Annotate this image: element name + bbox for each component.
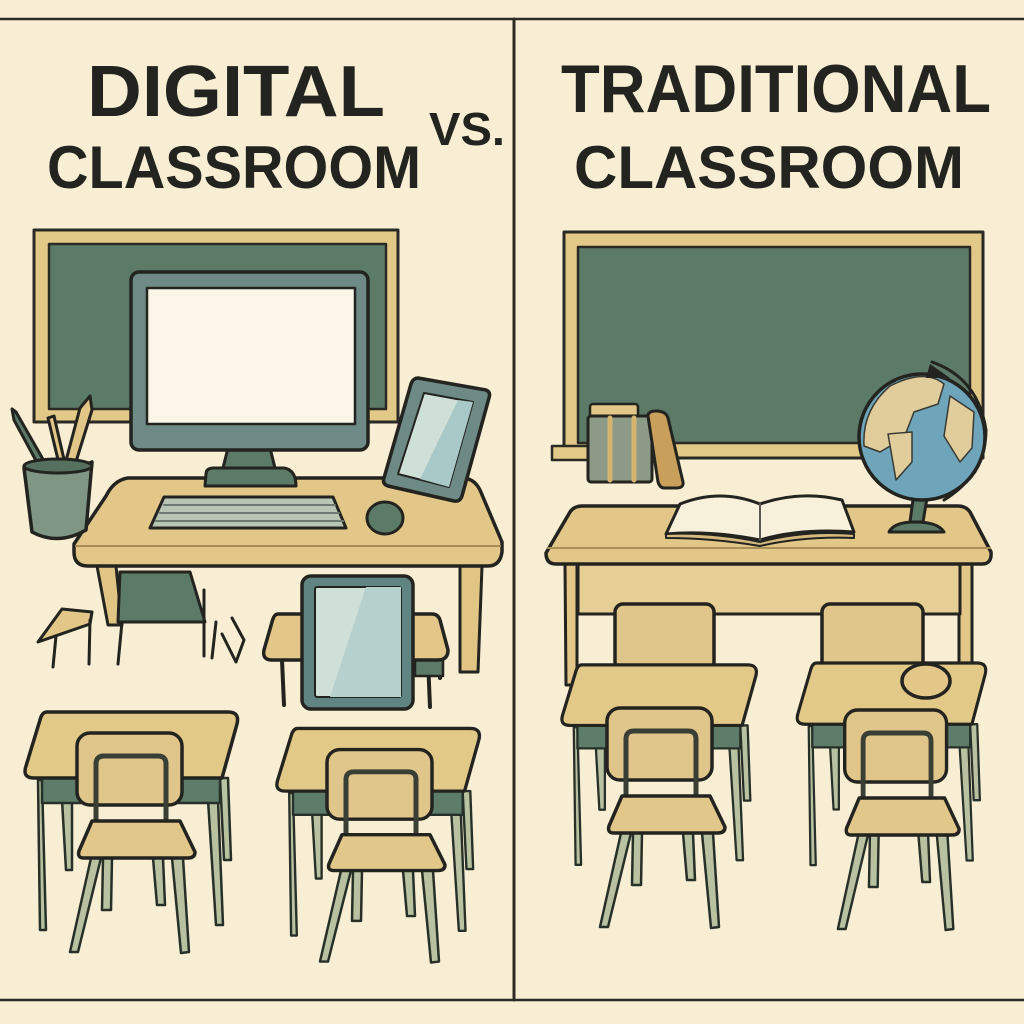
chair back right bbox=[822, 604, 923, 670]
small stool bbox=[38, 609, 92, 667]
title: traditional classroom bbox=[561, 51, 991, 201]
open book bbox=[666, 496, 854, 546]
computer monitor bbox=[131, 272, 368, 486]
title: traditional classroom: TRADITIONAL bbox=[561, 51, 991, 127]
small object on desk bbox=[902, 664, 950, 698]
books on ledge bbox=[588, 404, 683, 488]
panel: traditional classroom scene bbox=[546, 232, 991, 930]
student desk: traditional right bbox=[797, 663, 986, 930]
student desk: traditional left bbox=[562, 665, 756, 928]
keyboard bbox=[150, 497, 346, 528]
title: traditional classroom: CLASSROOM bbox=[574, 134, 964, 201]
title: digital classroom: DIGITAL bbox=[87, 52, 385, 132]
back student chair bbox=[118, 572, 244, 664]
blackboard bbox=[34, 230, 398, 422]
student desk: digital left bbox=[25, 712, 238, 953]
title: digital classroom: CLASSROOM bbox=[47, 134, 421, 201]
teacher desk bbox=[546, 506, 991, 685]
title: digital classroom bbox=[47, 52, 421, 201]
back student desk bbox=[264, 614, 448, 707]
globe bbox=[859, 362, 986, 532]
tablet on desk bbox=[384, 378, 490, 501]
teacher desk bbox=[74, 478, 502, 672]
chair back left bbox=[615, 604, 714, 670]
panel: digital classroom scene bbox=[12, 230, 502, 963]
pencil cup bbox=[12, 396, 92, 539]
title: vs.: VS. bbox=[429, 103, 505, 155]
blackboard bbox=[552, 232, 983, 460]
student desk: digital right bbox=[277, 728, 479, 963]
large tablet bbox=[302, 576, 413, 709]
mouse bbox=[367, 502, 403, 534]
